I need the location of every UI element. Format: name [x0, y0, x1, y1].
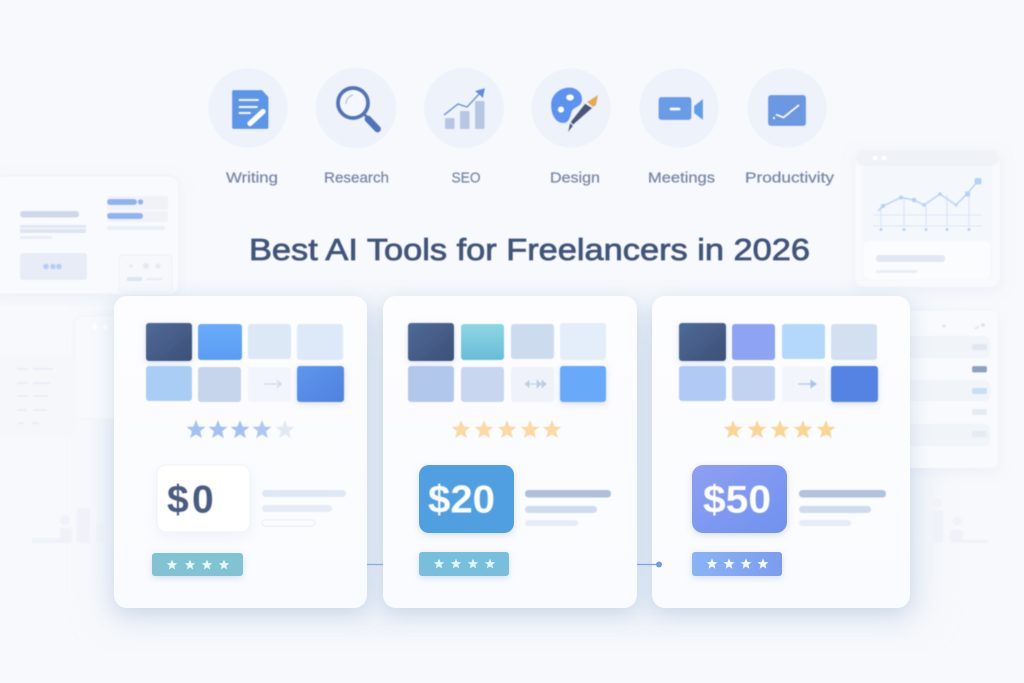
background panel: right list window [890, 311, 998, 468]
tool: Writing [208, 68, 288, 186]
tool: Research [316, 68, 396, 186]
arrow: connector from card two to card three [637, 562, 662, 568]
badge: rating chips [419, 552, 509, 576]
price: $50 [692, 465, 787, 533]
icon row [208, 68, 835, 186]
description lines [262, 490, 346, 526]
tool: Productivity: Productivity [745, 170, 835, 186]
arrow: connector from card one to card two [367, 564, 384, 566]
description lines [799, 490, 886, 526]
star rating: five of five [724, 420, 836, 438]
price: $50: $50 [703, 478, 771, 522]
badge: rating chips [152, 553, 243, 576]
panel: twenty dollar tool card [383, 296, 637, 608]
tool: Writing: Writing [226, 170, 278, 186]
price: $20 [419, 465, 514, 533]
panel: fifty dollar tool card [652, 296, 910, 608]
star rating: four of five [186, 420, 294, 438]
panel: free tool card [114, 296, 367, 608]
badge: rating chips [692, 552, 782, 576]
title: Best AI Tools for Freelancers in 2026 [249, 232, 810, 267]
price: $20: $20 [428, 478, 495, 522]
background panel: right line chart window [855, 149, 1000, 287]
tool: Productivity [745, 68, 835, 186]
background panel: left phone outline [74, 316, 134, 419]
tile grid [679, 323, 878, 402]
description lines [525, 490, 611, 526]
tool: Design [532, 68, 610, 186]
tool: SEO [424, 68, 504, 186]
price: $0 [157, 465, 250, 532]
background: faint bar chart bottom left [32, 508, 108, 543]
background panel: left interface window [0, 176, 179, 294]
tile grid [146, 323, 344, 402]
tool: SEO: SEO [452, 170, 480, 186]
star rating: five of five [452, 420, 562, 438]
tool: Research: Research [324, 170, 389, 186]
tool: Design: Design [550, 170, 600, 186]
background glow behind cards [110, 310, 920, 620]
tool: Meetings: Meetings [648, 170, 715, 186]
tool: Meetings [640, 68, 718, 186]
tile grid [408, 323, 606, 402]
background panel: left faint table [0, 357, 75, 437]
price: $0: $0 [167, 478, 214, 522]
background: faint bar chart bottom right [915, 498, 988, 543]
